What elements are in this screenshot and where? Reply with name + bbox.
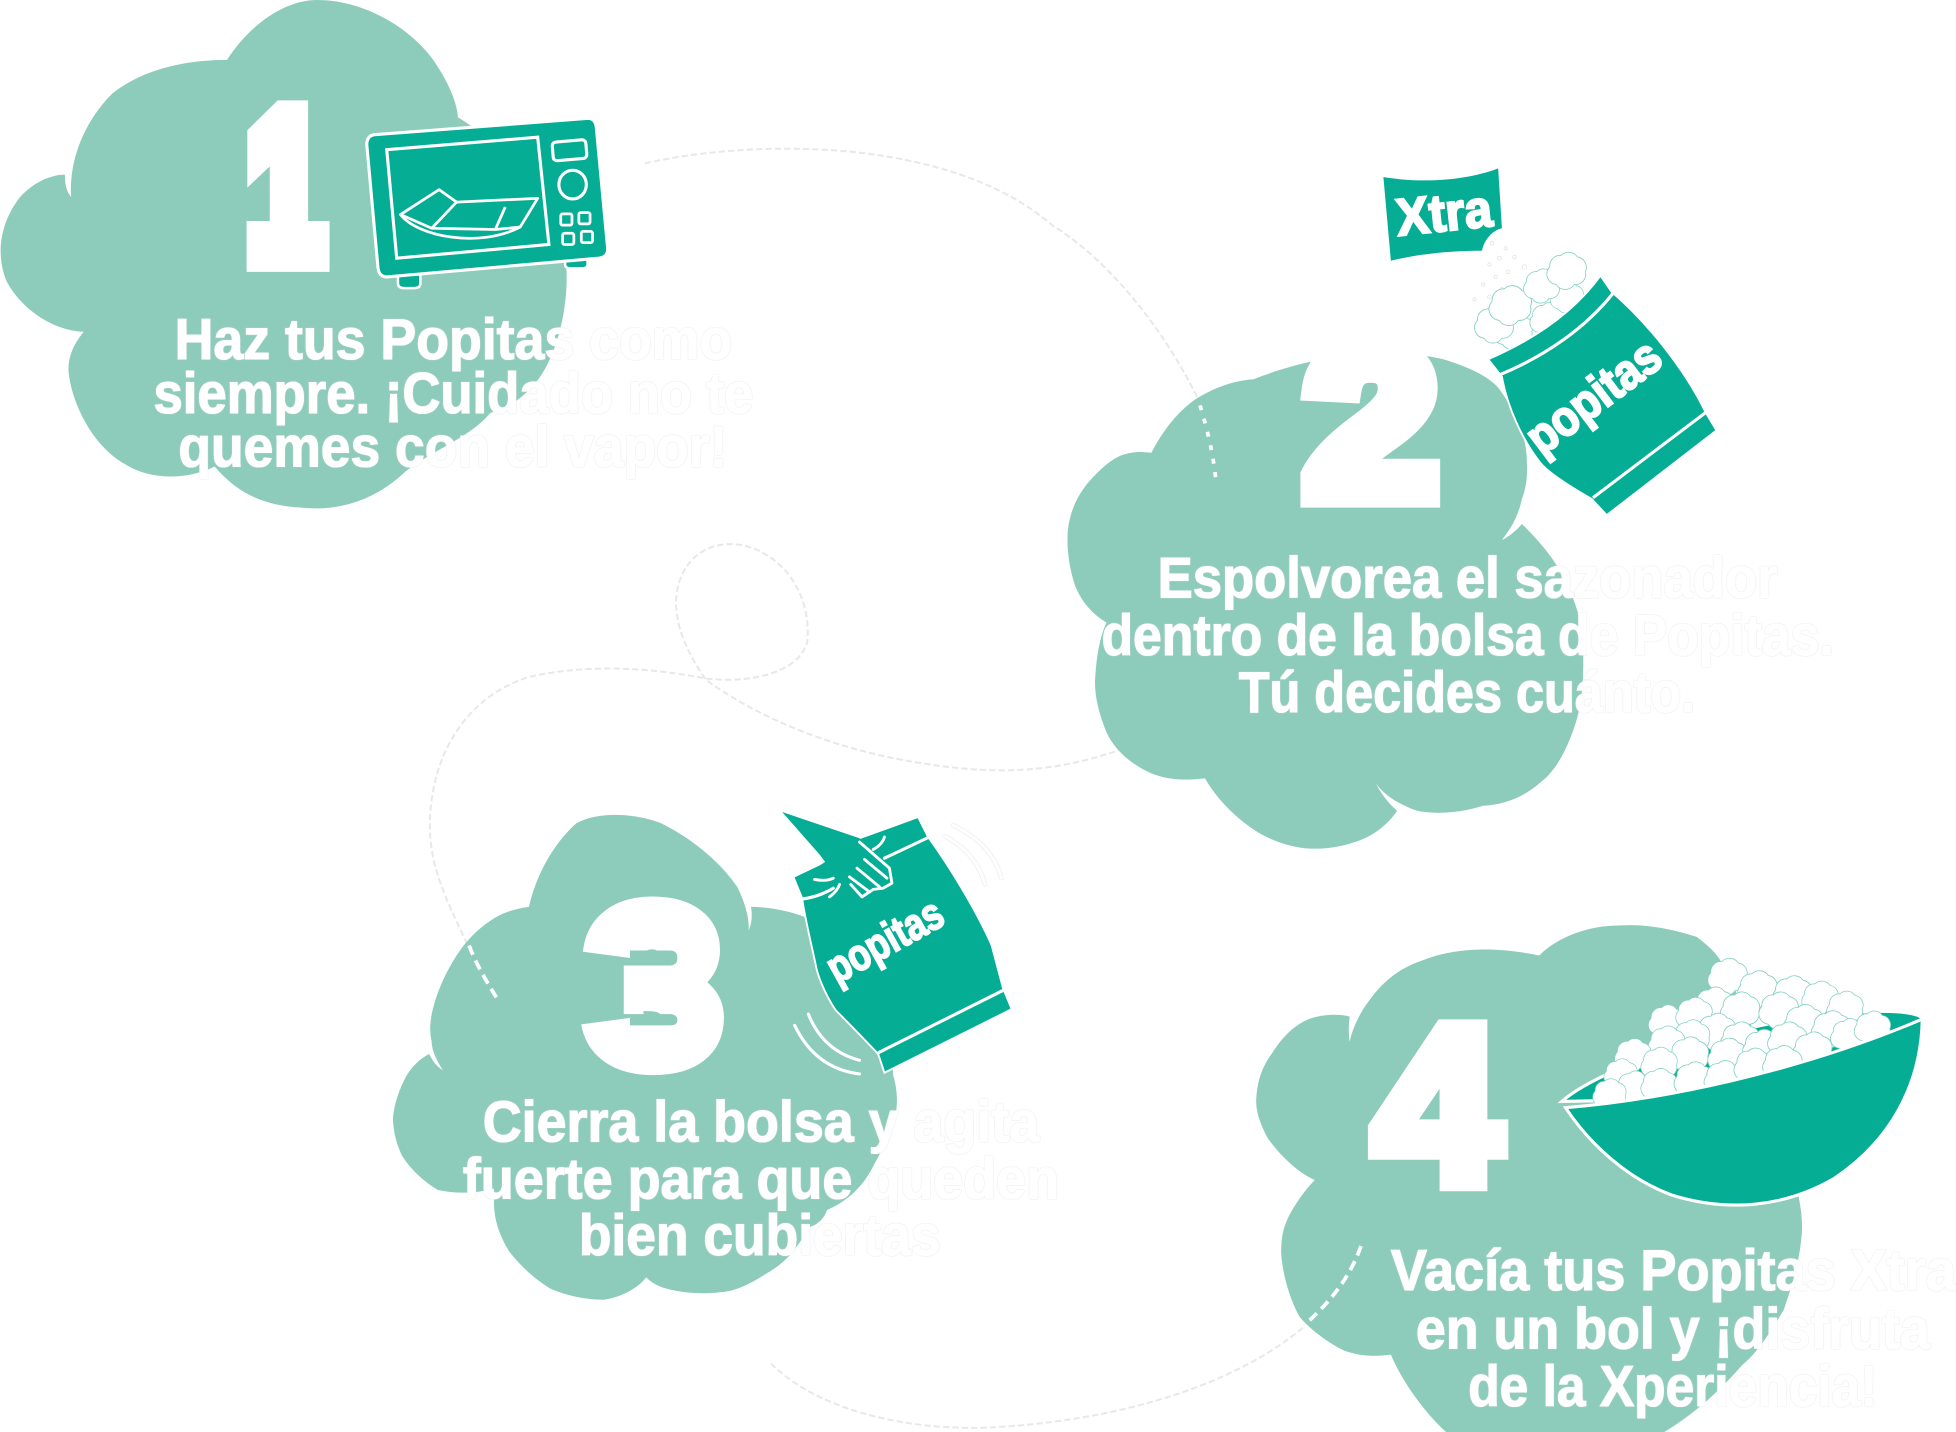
- number 4: 4: [1373, 981, 1501, 1231]
- panel: step 2: [1068, 168, 1834, 849]
- step 1 text: Haz tus Popitas como: [175, 308, 732, 372]
- cloud 3: [393, 815, 897, 1300]
- step 3 text: fuerte para que queden: [463, 1148, 1059, 1212]
- step 3 text: bien cubiertas: [579, 1204, 941, 1268]
- step 2 text: dentro de la bolsa de Popitas.: [1101, 604, 1834, 668]
- step 3 text: Cierra la bolsa y agita: [483, 1090, 1040, 1154]
- step 4 text: de la Xperiencia!: [1468, 1355, 1877, 1419]
- hand outline: [851, 842, 892, 897]
- microwave body: [367, 118, 608, 277]
- sachet label: Xtra: [1393, 180, 1496, 248]
- step 4 text: [1391, 1239, 1956, 1419]
- step 1 text: quemes con el vapor!: [178, 416, 727, 480]
- panel: step 3: [393, 812, 1059, 1300]
- step 1 text: [153, 308, 753, 480]
- number 3: 3: [591, 869, 716, 1102]
- bowl body: [1566, 1019, 1922, 1205]
- number 2: 2: [1306, 304, 1436, 541]
- route dashes on cloud 4: [1305, 1246, 1361, 1325]
- icon: seasoning sprinkles: [1473, 241, 1527, 301]
- dashed route connecting the steps: [430, 149, 1304, 1428]
- step 2 text: Tú decides cuánto.: [1239, 661, 1695, 725]
- microwave dial: [559, 170, 586, 199]
- panel: step 4: [1256, 925, 1956, 1432]
- popcorn pile: [1593, 958, 1891, 1110]
- step 2 text: Espolvorea el sazonador: [1158, 546, 1778, 610]
- bag body: [793, 817, 1012, 1073]
- step 1 text: siempre. ¡Cuidado no te: [153, 362, 753, 426]
- bag brand: popitas: [1515, 328, 1672, 465]
- route dashes on cloud 2: [1200, 405, 1216, 484]
- microwave display: [552, 139, 587, 161]
- icon: microwave: [367, 118, 608, 288]
- microwave buttons: [561, 213, 593, 244]
- arm and hand: [782, 812, 893, 897]
- number 1: 1: [248, 70, 323, 301]
- shake motion arcs: [795, 1014, 859, 1074]
- bag top seam: [800, 837, 929, 899]
- icon: bowl of popcorn: [1562, 958, 1922, 1205]
- microwave popcorn bag: [400, 190, 538, 238]
- bag body: [1488, 276, 1716, 515]
- microwave feet: [398, 253, 588, 288]
- panel: step 1: [1, 0, 753, 508]
- step 3 text: [463, 1090, 1059, 1268]
- icon: popcorn above bag 2: [1474, 252, 1586, 349]
- icon: open Popitas bag: [1488, 276, 1716, 515]
- cloud 1: [1, 0, 567, 508]
- shake motion arcs, faint top right: [944, 825, 1002, 886]
- bowl back rim: [1562, 1011, 1922, 1101]
- icon: Popitas bag held by hand: [782, 812, 1012, 1073]
- bag top seam: [1498, 292, 1614, 375]
- route dashes on cloud 3: [469, 946, 499, 1002]
- fingers: [815, 837, 887, 897]
- icon: Xtra sachet: [1383, 168, 1502, 261]
- bag brand: popitas: [817, 887, 952, 993]
- bag bottom seam: [878, 990, 1003, 1053]
- cloud 2: [1068, 353, 1583, 849]
- number 3 notch detail: [574, 951, 677, 1025]
- step 4 text: en un bol y ¡disfruta: [1416, 1297, 1931, 1361]
- cloud 4: [1256, 925, 1802, 1432]
- step 2 text: [1101, 546, 1834, 725]
- sachet body: [1383, 168, 1502, 261]
- bag bottom seam: [1593, 413, 1705, 498]
- microwave window: [387, 137, 549, 258]
